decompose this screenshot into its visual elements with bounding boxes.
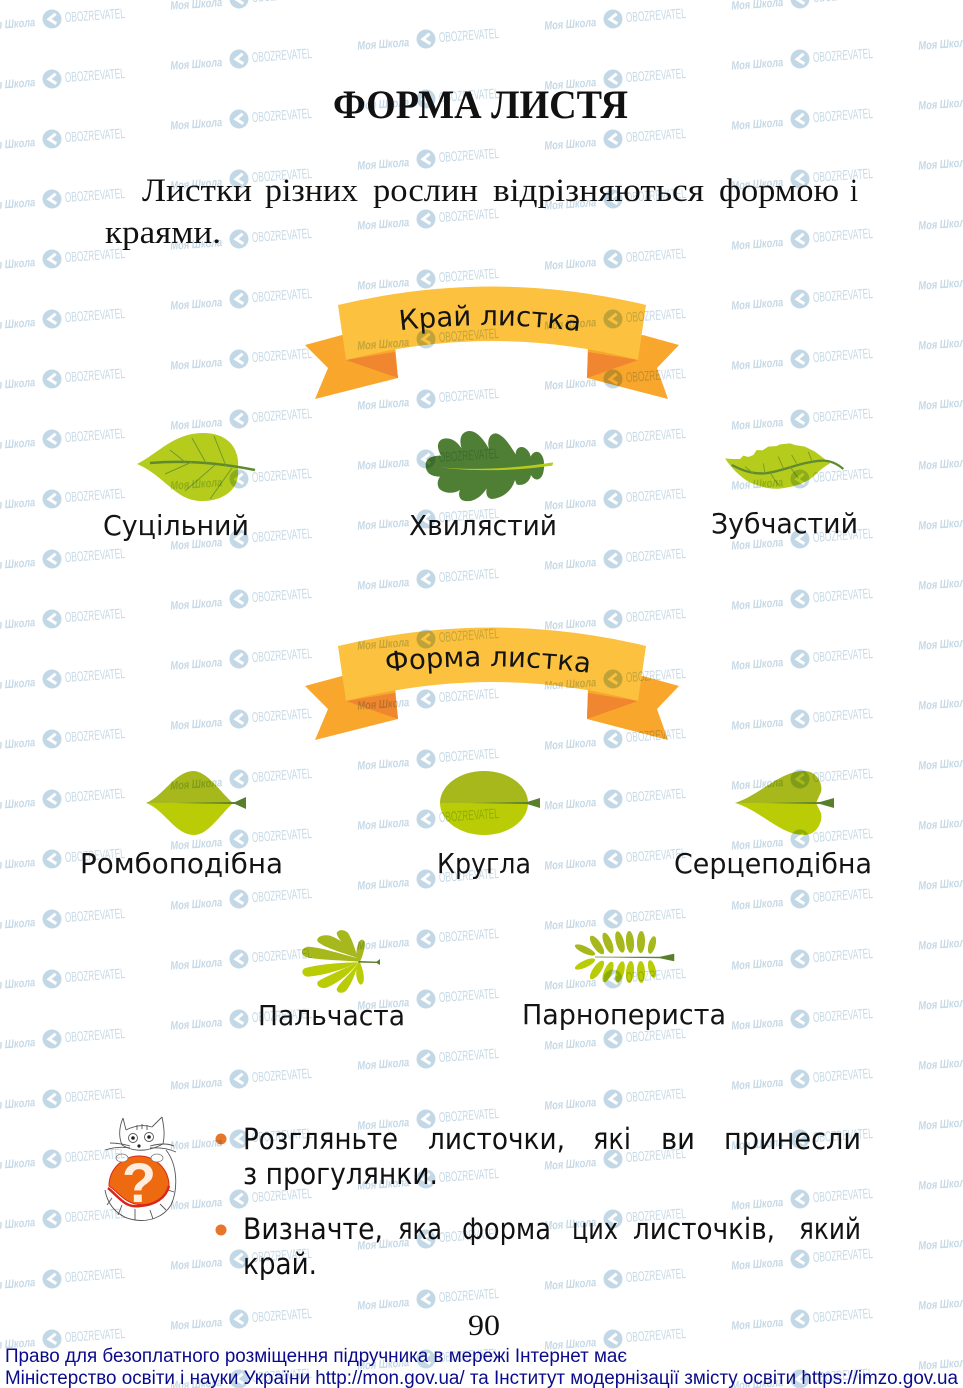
- intro paragraph: [105, 173, 858, 251]
- leaf: wavy edge: [426, 431, 553, 501]
- bullet list: листочків,: [633, 1212, 775, 1246]
- label: entire: Суцільний: [103, 509, 249, 542]
- label: toothed: Зубчастий: [711, 507, 858, 540]
- leaf: entire edge: [137, 433, 255, 501]
- bullet list: цих: [572, 1212, 618, 1246]
- leaf: pinnate: [574, 930, 674, 984]
- footer credits: Право для безоплатного розміщення підручника в мережі Інтернет має: [5, 1346, 627, 1367]
- leaf: palmate: [302, 930, 380, 993]
- intro paragraph: формою: [719, 173, 839, 209]
- bullet list: листочки,: [428, 1122, 565, 1156]
- icon: cat holding question mark: [105, 1117, 176, 1220]
- leaf: round: [440, 771, 540, 835]
- title: ФОРМА ЛИСТЯ: [333, 82, 628, 127]
- bullet list: яка: [398, 1212, 442, 1246]
- bullet list: ви: [661, 1122, 695, 1156]
- label: rhomboid: Ромбоподібна: [80, 847, 283, 880]
- label: heart-shaped: Серцеподібна: [674, 847, 872, 880]
- banner: leaf shape: [305, 628, 679, 740]
- label: palmate: Пальчаста: [258, 999, 405, 1032]
- intro paragraph: відрізняються: [493, 173, 704, 209]
- label: wavy: Хвилястий: [409, 509, 557, 542]
- bullet list: край.: [243, 1247, 317, 1281]
- intro paragraph: краями.: [105, 215, 221, 251]
- bullet list: який: [799, 1212, 861, 1246]
- bullet list: Визначте,: [243, 1212, 383, 1246]
- leaf: toothed edge: [725, 443, 843, 489]
- banner: leaf edge: Край листка: [400, 304, 579, 334]
- intro paragraph: і: [850, 173, 858, 209]
- bullet list: [216, 1122, 861, 1281]
- bullet list: які: [593, 1122, 631, 1156]
- banner: leaf edge: [305, 286, 679, 399]
- label: round: Кругла: [437, 847, 531, 880]
- page number: 90: [468, 1309, 500, 1342]
- leaf: rhomboid: [146, 771, 246, 835]
- bullet list: з прогулянки.: [243, 1157, 438, 1191]
- intro paragraph: рослин: [373, 173, 478, 209]
- leaf: heart-shaped: [735, 771, 834, 835]
- banner: leaf shape: Форма листка: [386, 650, 589, 674]
- label: pinnate: Парнопериста: [522, 998, 726, 1031]
- intro paragraph: Листки: [142, 173, 252, 209]
- bullet list: Розгляньте: [243, 1122, 398, 1156]
- bullet list: форма: [462, 1212, 551, 1246]
- bullet list: принесли: [724, 1122, 861, 1156]
- footer credits: [5, 1346, 958, 1388]
- icon: cat holding question mark: ?: [122, 1151, 156, 1214]
- intro paragraph: різних: [265, 173, 359, 209]
